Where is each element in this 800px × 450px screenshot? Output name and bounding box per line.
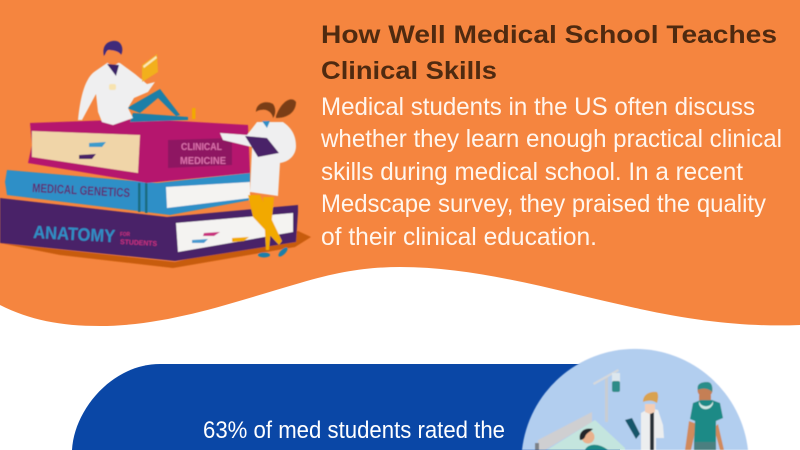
intro text block: whether they learn enough practical clinical (320, 125, 782, 153)
circle background (522, 349, 748, 450)
statistic text: 63% of med students rated the (203, 417, 505, 444)
book stack shadow (0, 231, 311, 268)
intro text block (320, 93, 782, 251)
panel: orange header with wavy bottom (0, 0, 800, 326)
intro text block: Medscape survey, they praised the quality (321, 190, 766, 218)
intro text block: skills during medical school. In a recent (321, 158, 743, 186)
doctor with clipboard (625, 392, 664, 450)
illustration: hospital scene in circle (522, 349, 748, 450)
book: Anatomy for Students (0, 198, 298, 261)
intro text block: Medical students in the US often discuss (321, 93, 755, 121)
intro text block: of their clinical education. (321, 223, 597, 251)
figure: male student reading (78, 41, 196, 125)
heading: How Well Medical School Teaches (321, 21, 777, 49)
hospital bed and patient (535, 412, 625, 450)
book: Clinical Medicine (28, 119, 250, 183)
book: Clinical Medicine: CLINICAL (181, 142, 222, 153)
panel: blue statistic panel (72, 364, 620, 450)
IV stand (593, 369, 620, 422)
illustration: stacked books with two medical students (0, 41, 311, 268)
book: Anatomy for Students: ANATOMY (33, 222, 116, 246)
heading (321, 21, 777, 85)
book: Medical Genetics (5, 170, 250, 215)
book: Medical Genetics: MEDICAL GENETICS (32, 181, 130, 200)
book: Anatomy for Students: FOR (120, 232, 130, 238)
book: Clinical Medicine: MEDICINE (180, 156, 226, 167)
figure: female student with book (220, 99, 296, 258)
book: Anatomy for Students: STUDENTS (120, 239, 158, 248)
heading: Clinical Skills (321, 57, 497, 85)
nurse in teal scrubs (685, 382, 724, 450)
